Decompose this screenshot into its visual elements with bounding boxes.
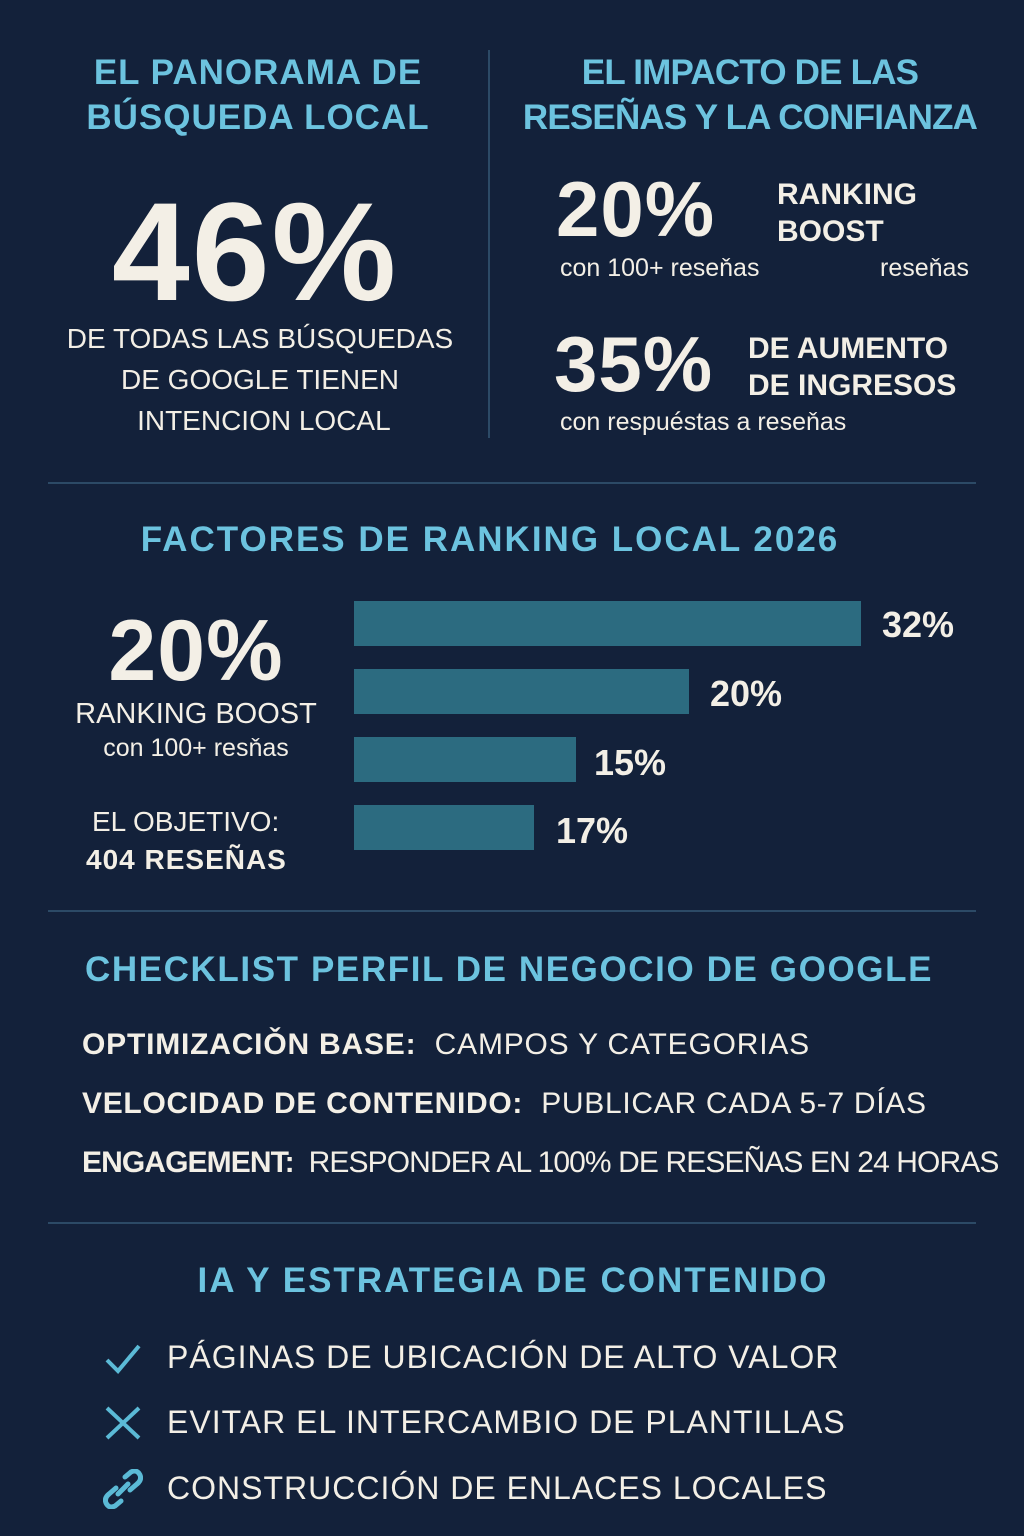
heading: panorama: EL PANORAMA DE [94, 53, 422, 92]
stat: 46%: 46% [112, 173, 398, 330]
heading: panorama: BÚSQUEDA LOCAL [86, 98, 430, 137]
stat: 35% ingresos: 35% [554, 320, 713, 408]
heading: factores: FACTORES DE RANKING LOCAL 2026 [141, 520, 839, 559]
stat: 20% ranking boost: con 100+ reseňas [560, 254, 759, 282]
checklist items [82, 1027, 998, 1179]
text: 46% description: DE GOOGLE TIENEN [121, 364, 399, 395]
heading: impacto reseñas: RESEÑAS Y LA CONFIANZA [523, 98, 977, 137]
heading: checklist: CHECKLIST PERFIL DE NEGOCIO DE GOOGLE [85, 950, 933, 989]
checklist items: ENGAGEMENT: RESPONDER AL 100% DE RESEÑAS EN 24 HORAS [82, 1146, 998, 1179]
bar chart: 20% [710, 673, 782, 714]
checklist items: VELOCIDAD DE CONTENIDO: PUBLICAR CADA 5-7 DÍAS [82, 1087, 927, 1120]
heading: panorama [86, 53, 430, 137]
text: objetivo [86, 806, 287, 875]
bar chart: 15% [594, 742, 666, 783]
icon: link [103, 1469, 143, 1509]
text: 46% description: INTENCION LOCAL [137, 405, 391, 436]
stat: 20% left: RANKING BOOST [75, 698, 317, 730]
stat: 35% ingresos [554, 320, 956, 436]
stat: 20% left: 20% [108, 603, 284, 699]
stat: 20% ranking boost: RANKING [777, 178, 917, 211]
list: IA items: CONSTRUCCIÓN DE ENLACES LOCALES [167, 1470, 827, 1506]
stat: 35% ingresos: DE INGRESOS [748, 369, 956, 402]
stat: 35% ingresos: con respuéstas a reseňas [560, 408, 846, 436]
checklist items: OPTIMIZACIǑN BASE: CAMPOS Y CATEGORIAS [82, 1028, 810, 1061]
stat: 20% left: con 100+ resňas [103, 734, 289, 762]
heading: IA: IA Y ESTRATEGIA DE CONTENIDO [198, 1261, 828, 1300]
stat: 20% ranking boost [556, 165, 969, 282]
stat: 20% left [75, 603, 317, 762]
stat: 20% ranking boost: BOOST [777, 215, 884, 248]
text: objetivo: 404 RESEÑAS [86, 844, 287, 875]
stat: 20% ranking boost: reseňas [880, 254, 969, 282]
list: IA items: EVITAR EL INTERCAMBIO DE PLANTILLAS [167, 1404, 846, 1440]
bar chart [354, 601, 954, 851]
icon: x [106, 1406, 140, 1440]
list: IA items: PÁGINAS DE UBICACIÓN DE ALTO VALOR [167, 1339, 839, 1375]
text: objetivo: EL OBJETIVO: [92, 806, 279, 837]
stat: 20% ranking boost: 20% [556, 165, 715, 253]
text: 46% description: DE TODAS LAS BÚSQUEDAS [67, 323, 453, 354]
bar chart: 17% [556, 810, 628, 851]
bar chart: 32% [882, 604, 954, 645]
text: 46% description [67, 323, 453, 436]
icon: check [106, 1344, 140, 1374]
heading: impacto reseñas: EL IMPACTO DE LAS [582, 53, 918, 92]
list: IA items [103, 1339, 846, 1509]
stat: 35% ingresos: DE AUMENTO [748, 332, 948, 365]
heading: impacto reseñas [523, 53, 977, 137]
